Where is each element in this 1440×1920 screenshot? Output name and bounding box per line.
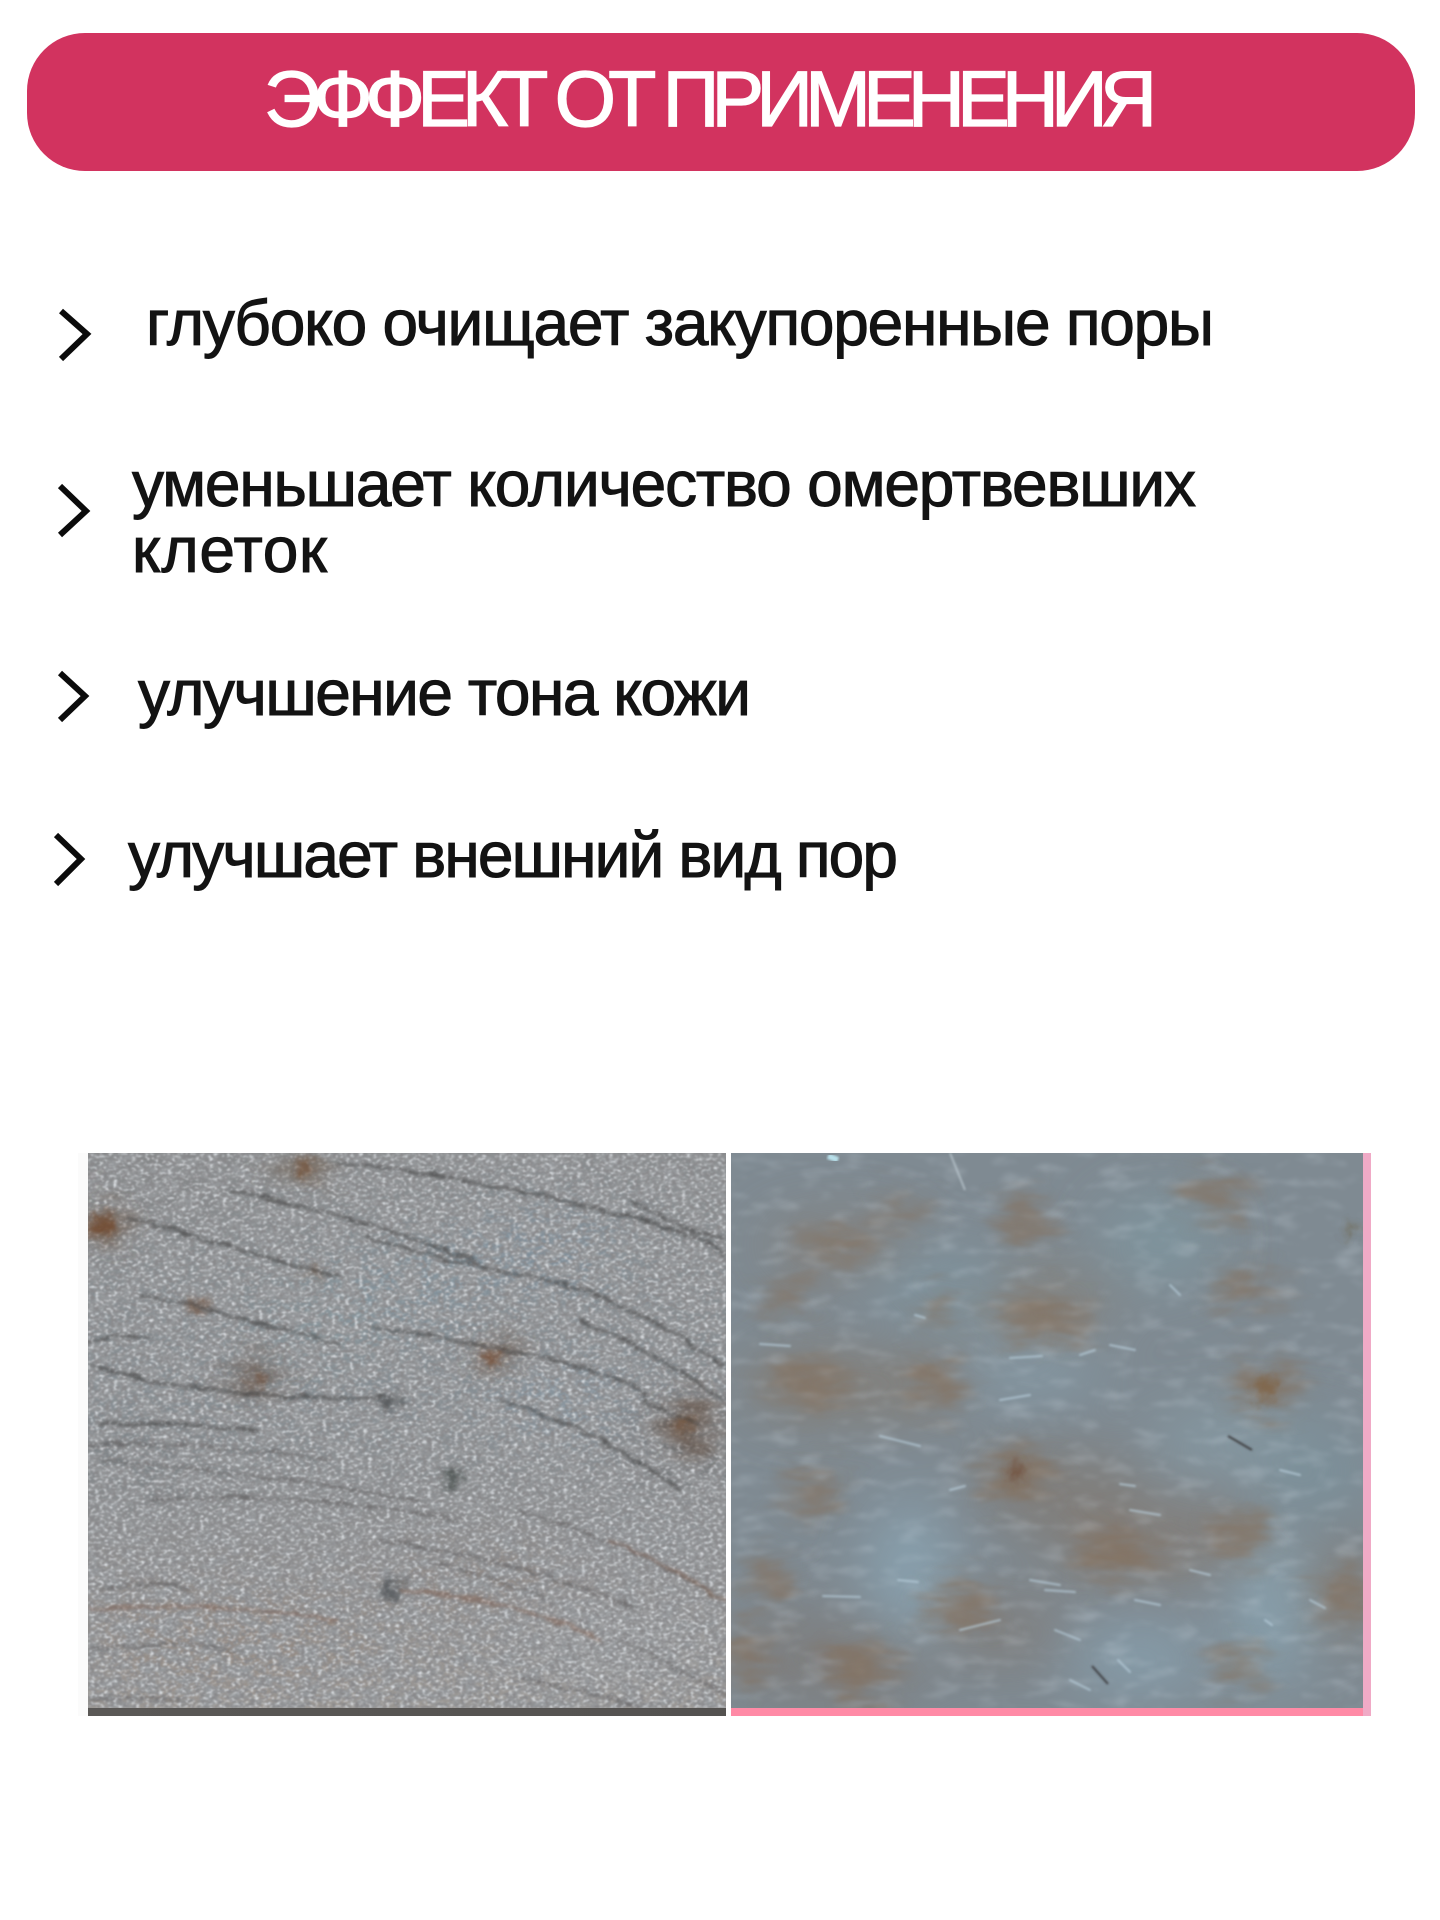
title banner xyxy=(27,33,1415,171)
benefit 3: улучшение тона кожи xyxy=(138,657,751,729)
photo: skin before xyxy=(78,1153,730,1716)
benefit 4: улучшает внешний вид пор xyxy=(128,819,898,891)
photo: skin after xyxy=(726,1153,1390,1716)
before/after photos xyxy=(78,1153,1390,1716)
benefit list xyxy=(56,287,1214,891)
benefit 2: клеток xyxy=(132,514,328,586)
wrinkle lines xyxy=(88,1162,726,1706)
benefit 2: уменьшает количество омертвевших xyxy=(132,448,1196,520)
title text: ЭФФЕКТ ОТ ПРИМЕНЕНИЯ xyxy=(264,54,1157,143)
benefit 2 xyxy=(60,448,1196,586)
benefit 1: глубоко очищает закупоренные поры xyxy=(146,287,1214,359)
highlights and hairs xyxy=(760,1285,1325,1690)
